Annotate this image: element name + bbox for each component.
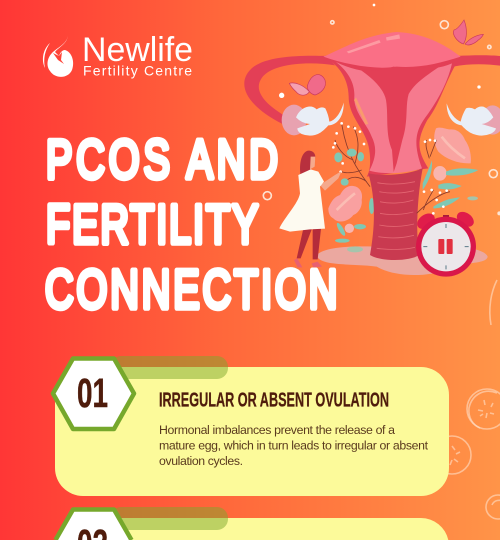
tab bar [110, 507, 228, 530]
hair [300, 151, 315, 176]
title [45, 130, 337, 321]
card body text: mature egg, which in turn leads to irregular or absent [159, 438, 429, 452]
legs [297, 229, 321, 259]
logo [43, 31, 193, 78]
card body text: ovulation cycles. [159, 454, 243, 468]
ovary right [447, 103, 500, 136]
illustration: uterus, woman, flowers and clock [244, 4, 500, 277]
card body text [159, 423, 429, 468]
card background [55, 367, 449, 496]
inner body [336, 62, 452, 173]
decorative citrus outlines [433, 280, 500, 519]
tubes and uterus body [244, 32, 500, 260]
sparkle rings and dots [263, 4, 500, 215]
ovary left [282, 103, 344, 136]
number hexagon [56, 510, 132, 540]
tab bar [110, 356, 228, 379]
flower left [328, 186, 362, 233]
uterine cavity [352, 61, 447, 172]
title: PCOS AND [46, 130, 278, 191]
butterfly left [289, 75, 325, 95]
logo tagline: Fertility Centre [83, 62, 192, 78]
logo wordmark: Newlife [82, 31, 193, 69]
step card 02 [56, 507, 448, 540]
flower right [433, 128, 471, 181]
woman [279, 151, 342, 267]
butterfly right [453, 20, 483, 45]
logo icon [43, 35, 73, 77]
cervix [368, 168, 423, 260]
alarm clock [414, 209, 477, 277]
dress [279, 169, 325, 232]
step card 01 [53, 356, 449, 496]
number hexagon: 01 [77, 370, 108, 416]
highlights [347, 34, 400, 53]
left fallopian tube [244, 56, 335, 124]
card background [56, 518, 448, 540]
right fallopian tube [453, 55, 500, 67]
title: CONNECTION [45, 260, 337, 321]
outer wall [323, 47, 461, 177]
branches and leaves right [417, 139, 478, 215]
number hexagon [53, 358, 134, 429]
fundus [323, 32, 461, 68]
branches and leaves left [332, 122, 374, 252]
title: FERTILITY [46, 195, 258, 256]
card body text: Hormonal imbalances prevent the release of a [159, 423, 395, 437]
ground shadow [317, 246, 488, 275]
shoes [294, 258, 322, 267]
face and arm [310, 157, 342, 191]
